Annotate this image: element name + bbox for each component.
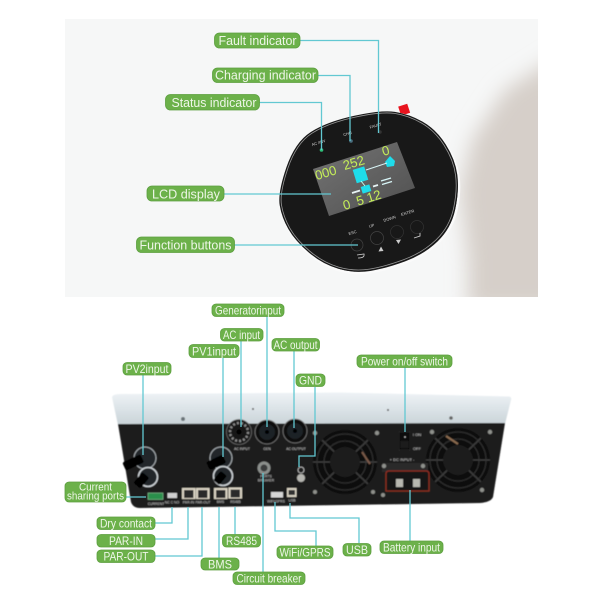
- callout: USB: USB: [346, 543, 368, 557]
- LCD readings: 252: [341, 152, 366, 173]
- indicator captions and LEDs: FAULT: [369, 121, 383, 130]
- callout: GND: GND: [299, 374, 322, 388]
- callout: Function buttons: [136, 237, 358, 252]
- circuit breaker knob: [258, 462, 275, 482]
- callout: RS485: RS485: [226, 534, 257, 548]
- callout: Status indicator: Status indicator: [172, 95, 257, 110]
- callout: Charging indicator: Charging indicator: [215, 68, 317, 82]
- LCD screen: [313, 142, 415, 216]
- cooling fan right: [426, 428, 490, 492]
- function buttons: [348, 208, 424, 258]
- callout: AC output: [272, 338, 320, 428]
- callout: Battery input: Battery input: [383, 540, 441, 554]
- function buttons: DOWN: [383, 214, 396, 223]
- callout: BMS: BMS: [208, 558, 232, 572]
- callout: Generator input: [212, 304, 284, 427]
- LCD readings: 000: [313, 162, 338, 183]
- callout: PV2 input: PV2input: [126, 362, 169, 376]
- callout: Dry contact: Dry contact: [100, 516, 153, 530]
- callout: GND: [296, 374, 325, 467]
- callout: AC input: AC input: [223, 328, 261, 342]
- circuit breaker knob: BREAKER: [258, 478, 275, 482]
- power switch: I ON: [413, 432, 421, 437]
- display control panel body: [279, 111, 459, 273]
- callout: Battery input: [380, 490, 443, 554]
- callout: LCD display: [147, 186, 331, 202]
- callout: Dry contact: [97, 507, 172, 530]
- RJ45 ports: PAR-IN: [183, 500, 195, 504]
- callout: Power on/off switch: [357, 354, 452, 432]
- callout: PV1 input: PV1input: [192, 344, 237, 358]
- callout: PAR-IN: [97, 507, 188, 548]
- housing dots: [181, 408, 453, 421]
- power switch: [399, 432, 422, 451]
- dry contact connector: [165, 493, 180, 504]
- callout: PV1 input: [189, 344, 239, 457]
- WiFi USB port: [267, 492, 286, 504]
- callout: Function buttons: Function buttons: [140, 238, 232, 252]
- callout: WiFi/GPRS: [275, 502, 333, 560]
- RJ45 ports: BMS: [217, 500, 225, 504]
- callout: BMS: [201, 507, 239, 572]
- callout: Circuit breaker: [233, 473, 305, 586]
- callout: Current sharing ports: Current: [79, 482, 112, 494]
- callout: Generator input: Generatorinput: [215, 304, 282, 318]
- RJ45 ports: RS485: [230, 500, 241, 504]
- battery input terminal: [382, 457, 429, 491]
- USB-B port: USB: [289, 498, 296, 502]
- circuit breaker knob: PORTS: [260, 474, 273, 478]
- AC input gland: [226, 420, 252, 451]
- callout: Fault indicator: [214, 33, 378, 133]
- indicator captions and LEDs: AC /INV: [311, 138, 327, 147]
- LCD energy flow icons: [352, 156, 395, 194]
- callout: PAR-IN: PAR-IN: [109, 534, 143, 548]
- RJ45 ports: PAR-OUT: [195, 500, 211, 504]
- function buttons: ENTER: [400, 208, 415, 217]
- callout: AC output: AC output: [274, 338, 318, 352]
- callout: PAR-OUT: [97, 507, 202, 564]
- LCD readings: 5 12: [354, 187, 383, 209]
- callout: Circuit breaker: Circuit breaker: [236, 572, 302, 586]
- callout: AC input: [220, 328, 263, 427]
- AC output gland: [283, 419, 307, 451]
- cooling fan left: [313, 430, 377, 494]
- housing light cover: [112, 392, 511, 425]
- PV2 connectors: [122, 447, 158, 489]
- panel: front display photo: [65, 19, 560, 310]
- function buttons: UP: [368, 222, 375, 229]
- current sharing connector: [148, 493, 164, 506]
- housing black body: [118, 423, 505, 508]
- AC output gland: AC OUTPUT: [286, 447, 306, 451]
- generator gland: [255, 420, 279, 451]
- GND terminal: [297, 467, 305, 482]
- function buttons: ESC: [348, 229, 357, 236]
- panel: inverter underside: [112, 392, 511, 508]
- callout: Charging indicator: [212, 68, 350, 141]
- callout: Status indicator: [166, 94, 322, 150]
- generator gland: GEN: [263, 447, 271, 451]
- power switch: OFF: [413, 446, 422, 451]
- callout: Current sharing ports: sharing ports: [67, 490, 124, 502]
- callout: USB: [290, 503, 371, 557]
- indicator captions and LEDs: [311, 121, 383, 152]
- PV1 connectors: [206, 447, 232, 486]
- USB-B port: [287, 488, 296, 502]
- LCD readings: 0: [380, 142, 391, 159]
- callout: Current sharing ports: [65, 482, 146, 502]
- LCD readings: 0: [341, 196, 352, 213]
- mounting screws: [313, 430, 492, 497]
- callout: Fault indicator: Fault indicator: [218, 33, 297, 48]
- callout: RS485: [222, 507, 260, 548]
- callout: LCD display: LCD display: [152, 186, 220, 202]
- current sharing connector: CURRENT: [148, 502, 164, 506]
- LCD readings: [313, 142, 391, 213]
- wall background: [65, 19, 538, 297]
- RJ45 ports: [182, 488, 242, 504]
- WiFi USB port: WIFI/GPRS: [267, 500, 286, 504]
- callout: Power on/off switch: Power on/off switch: [361, 354, 448, 368]
- indicator captions and LEDs: CHG: [343, 130, 353, 137]
- wall shadow: [454, 59, 538, 297]
- battery input terminal: + DC INPUT -: [390, 457, 415, 462]
- red stop knob: [398, 104, 410, 116]
- callout: PV2 input: [123, 362, 171, 455]
- dry contact connector: NC C NO: [165, 500, 180, 504]
- callout: PAR-OUT: PAR-OUT: [104, 550, 149, 564]
- AC input gland: AC INPUT: [234, 447, 250, 451]
- callout: WiFi/GPRS: WiFi/GPRS: [280, 546, 330, 560]
